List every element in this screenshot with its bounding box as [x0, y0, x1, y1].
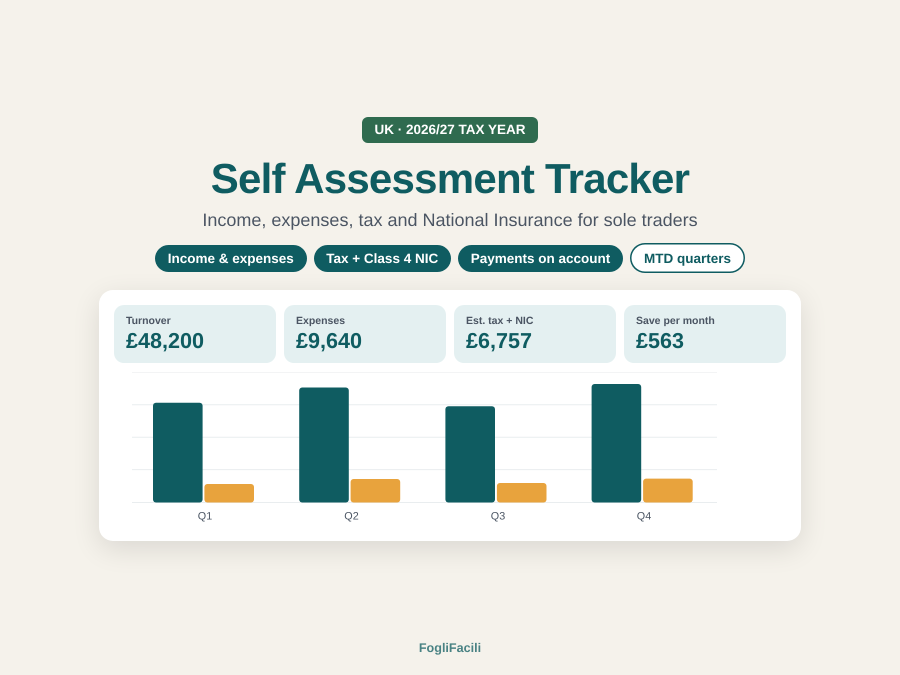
- badge: tax year: UK · 2026/27 TAX YEAR: [374, 122, 526, 137]
- KPI: save per month: £563: [636, 328, 684, 353]
- KPI: expenses: [284, 305, 446, 363]
- title: Self Assessment Tracker: [211, 155, 689, 202]
- KPI: estimated tax and NIC: [454, 305, 616, 363]
- footer brand: FogliFacili: [419, 641, 481, 655]
- pill: tax and class 4 NIC: Tax + Class 4 NIC: [326, 251, 438, 266]
- pill: tax and class 4 NIC: [314, 245, 450, 272]
- Q3 bars: Q3: [491, 510, 505, 522]
- Q1 bars: [153, 403, 254, 522]
- pill: MTD quarters: MTD quarters: [644, 251, 731, 266]
- pills row: [155, 243, 745, 273]
- KPI: expenses: Expenses: [296, 315, 345, 327]
- KPI: save per month: [624, 305, 786, 363]
- KPI: turnover: [114, 305, 276, 363]
- Q2 bars: Q2: [344, 510, 359, 522]
- KPI: estimated tax and NIC: Est. tax + NIC: [466, 315, 533, 327]
- KPI: save per month: Save per month: [636, 315, 715, 327]
- pill: income and expenses: [155, 245, 306, 272]
- Q4 bars: Q4: [637, 510, 651, 522]
- KPI row: [114, 305, 786, 363]
- Q1 bars: Q1: [198, 510, 212, 522]
- subtitle: Income, expenses, tax and National Insurance for sole traders: [202, 210, 698, 230]
- pill: MTD quarters: [630, 243, 745, 273]
- badge: tax year: [362, 117, 538, 143]
- pill: income and expenses: Income & expenses: [168, 251, 294, 266]
- KPI: turnover: Turnover: [126, 315, 171, 327]
- Q2 bars: [299, 388, 400, 522]
- Q4 bars: [592, 384, 693, 522]
- KPI: expenses: £9,640: [296, 328, 362, 353]
- Q3 bars: [445, 406, 546, 522]
- KPI: turnover: £48,200: [126, 328, 204, 353]
- panel: tracker card: [99, 290, 801, 541]
- pill: payments on account: Payments on account: [471, 251, 610, 266]
- pill: payments on account: [458, 245, 623, 272]
- KPI: estimated tax and NIC: £6,757: [466, 328, 532, 353]
